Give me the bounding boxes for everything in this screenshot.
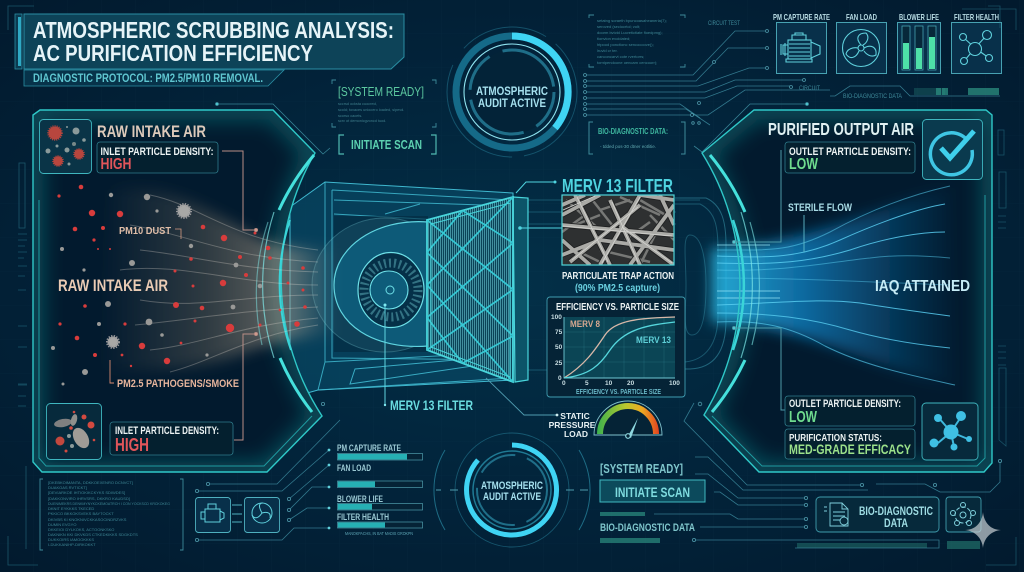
code block top: htpood ponctionc sencocoove();	[597, 42, 654, 47]
readout: purification status	[785, 429, 915, 459]
code block bottom left: [DAKKONVIRO IHRVSRS, DKKRO KAUDSD]	[48, 496, 130, 501]
button: initiate scan top: INITIATE SCAN	[351, 138, 422, 152]
label: PM2.5: PM2.5 PATHOGENS/SMOKE	[117, 378, 239, 390]
readout: inlet density top: HIGH	[100, 156, 132, 173]
heading: purified output air: PURIFIED OUTPUT AIR	[768, 119, 914, 139]
top right icon: fan load: FAN LOAD	[846, 12, 877, 22]
readout: inlet density top: INLET PARTICLE DENSITY:	[100, 146, 214, 158]
dial: atmospheric audit active top	[447, 27, 577, 157]
code block bottom left: PKKICO BKKOKSVEKS BAYTOCKT	[48, 511, 114, 516]
caption: particulate trap	[562, 270, 674, 294]
readout: inlet density bottom: INLET PARTICLE DENSITY:	[115, 425, 219, 437]
chart: efficiency vs particle size: MERV 8	[570, 319, 600, 329]
particle haze flow	[100, 188, 335, 370]
label: lower MERV 13 filter: MERV 13 FILTER	[390, 397, 473, 413]
code block top: lruvid cr ter.	[597, 48, 618, 53]
label: IAQ attained: IAQ ATTAINED	[875, 278, 970, 295]
icon: large particles	[46, 404, 102, 460]
curve: MERV 13	[564, 322, 675, 378]
status: system ready top: scorso cacets.	[338, 114, 362, 118]
label: PM10 dust: PM10 DUST	[119, 226, 171, 237]
code block bottom left: DUMIN EVGYO	[48, 522, 76, 527]
axis labels: 25	[555, 360, 563, 367]
gray dust particles	[51, 193, 262, 386]
bar: fan load: FAN LOAD	[337, 463, 371, 473]
status bars: MANOKPACHS, IN BAT MADIS GROKPN	[345, 531, 413, 536]
dial text: ATMOSPHERIC	[476, 86, 548, 98]
dial text: AUDIT ACTIVE	[478, 98, 546, 110]
right side decorative gauges	[962, 6, 1016, 565]
status: system ready bottom: [SYSTEM READY]	[600, 461, 683, 476]
label: bio-diagnostic data bottom: BIO-DIAGNOSTIC DATA	[600, 522, 695, 534]
status: system ready top: scrv ot demonicgvoncd tuod.	[338, 119, 386, 123]
heading: raw intake air: RAW INTAKE AIR	[97, 122, 206, 141]
icons: bottom motor and fan	[196, 498, 280, 532]
top right icon: blower life: BLOWER LIFE	[899, 12, 939, 22]
labels: circuit	[708, 20, 903, 100]
blue air flow	[712, 186, 958, 388]
chart: efficiency vs particle size	[547, 297, 685, 397]
icon: MERV 13 filter frame	[426, 196, 529, 384]
code block bottom left: DAKNIKN KKI DKVKDS CTKEDKIKKS SDGKDTS	[48, 532, 138, 537]
readout: outlet density bottom: LOW	[789, 409, 818, 426]
icon: gear network	[946, 497, 981, 532]
code block top: setatng soraeth bpuncoasaheaneria(7);	[597, 18, 667, 23]
button: initiate scan bottom	[600, 480, 705, 502]
central unit: blower housing	[290, 182, 726, 395]
panel: raw intake air	[33, 110, 335, 472]
dial: atmospheric audit active bottom	[434, 433, 590, 547]
axis labels: 100	[551, 314, 562, 321]
dial text	[476, 86, 548, 110]
code block bottom left: [DEVIARKOE IHTIOKIKCKYKS SDIWDES]	[48, 490, 125, 495]
code block bottom left: DKIVBS KI KNOKNIVCKKASOCINDRZVKS	[48, 517, 127, 522]
axis labels: 0	[562, 380, 566, 387]
label: lower MERV 13 filter	[384, 304, 473, 413]
status: system ready top: [SYSTEM READY]	[338, 85, 424, 99]
axis labels: 20	[627, 380, 635, 387]
readout: purification status: PURIFICATION STATUS:	[789, 432, 882, 444]
connector: lower density to flow	[234, 332, 258, 440]
bar: blower life: BLOWER LIFE	[337, 494, 383, 504]
status: system ready top: sccrsd ocksta cuocrecl,	[338, 102, 377, 106]
bar: PM capture rate: PM CAPTURE RATE	[337, 443, 401, 453]
code block bottom left: DUAKOAS RVTICKT]	[48, 485, 87, 490]
axis labels: 50	[555, 344, 563, 351]
label: sterile flow: STERILE FLOW	[788, 202, 852, 214]
labels: circuit: CIRCUIT	[799, 85, 820, 92]
code block top	[589, 15, 685, 67]
top right icon: fan load	[836, 12, 886, 74]
caption: particulate trap: (90% PM2.5 capture)	[575, 282, 660, 294]
readout: inlet density bottom	[110, 422, 233, 455]
curve: MERV 8	[564, 317, 675, 378]
status: system ready top: scold; tovaces uniocero loaded, sipevd.	[338, 108, 404, 112]
gauge: static pressure load	[486, 378, 662, 439]
micrograph: filter fibres	[562, 195, 674, 265]
readout: outlet density bottom: OUTLET PARTICLE DENSITY:	[789, 398, 901, 410]
code block top: doorm bvictd Lucretictiate fioedpmg);	[597, 30, 663, 35]
axis labels: 0	[558, 375, 562, 382]
code block top: tionvion evoidated;	[597, 36, 630, 41]
connector: density to flow	[222, 151, 258, 232]
gauge: static pressure load: PRESSURE	[549, 420, 596, 430]
label: raw intake air centre: RAW INTAKE AIR	[58, 276, 168, 295]
subtitle banner	[24, 70, 284, 86]
code block top: seroved (seciocrtol; volt;	[597, 24, 640, 29]
code block bottom left: DKKEIOI DYLKOKS, ACTOONKSKO	[48, 527, 114, 532]
circuit traces: top right	[584, 30, 1000, 125]
particle flow streak lines	[120, 195, 318, 372]
caption: particulate trap: PARTICULATE TRAP ACTION	[562, 270, 674, 282]
labels: circuit: CIRCUIT TEST	[708, 20, 740, 27]
top right icon: filter health: FILTER HEALTH	[954, 12, 999, 22]
panel: purified output air	[702, 110, 992, 472]
title banner	[15, 14, 404, 69]
chart: efficiency vs particle size: MERV 13	[636, 335, 671, 346]
readout: inlet density top	[97, 142, 218, 173]
axis labels: 75	[555, 329, 563, 336]
heading: MERV 13 filter: MERV 13 FILTER	[562, 175, 673, 196]
icon: raw particles	[40, 120, 92, 174]
outlet stream lines	[717, 186, 955, 385]
subtitle banner: DIAGNOSTIC PROTOCOL: PM2.5/PM10 REMOVAL.	[33, 73, 263, 85]
callout: bio-diagnostic data top: - tdded pos-30 dtner eotlitie.	[600, 144, 656, 149]
chart: efficiency vs particle size: EFFICIENCY VS. PARTICLE SIZE	[576, 389, 661, 396]
box: bio-diagnostic data: BIO-DIAGNOSTIC	[859, 506, 933, 518]
box: bio-diagnostic data: DATA	[884, 518, 908, 530]
label: PM2.5	[110, 360, 239, 390]
button: initiate scan top	[339, 135, 436, 154]
label: sterile flow	[788, 202, 852, 252]
callout: bio-diagnostic data top: BIO-DIAGNOSTIC DATA:	[598, 127, 668, 136]
axis labels: 5	[585, 380, 589, 387]
dial: atmospheric audit active bottom: ATMOSPHERIC	[481, 480, 543, 492]
heading: MERV 13 filter	[516, 175, 673, 230]
readout: inlet density bottom: HIGH	[115, 435, 149, 455]
panel outline	[702, 110, 992, 472]
readout: outlet density bottom	[785, 396, 915, 426]
code block bottom left	[40, 479, 183, 550]
code block bottom left: [DKEBKOIMANTA, DDKKOEXENRO DCNVCT]	[48, 480, 133, 485]
circuit: panel tip traces	[216, 102, 808, 154]
title text: AC PURIFICATION EFFICIENCY	[33, 40, 313, 66]
axis labels: 100	[669, 380, 680, 387]
title text	[33, 17, 394, 66]
labels: circuit: BIO-DIAGNOSTIC DATA	[843, 93, 903, 100]
icon: blower fan	[312, 218, 458, 352]
box: bio-diagnostic data	[816, 497, 939, 532]
gauge: static pressure load: STATIC	[560, 411, 590, 421]
bar: filter health: FILTER HEALTH	[337, 512, 389, 522]
top right icon: PM capture rate: PM CAPTURE RATE	[773, 12, 830, 22]
code block bottom left: DUKKOIRS IAMOOKKKS	[48, 537, 94, 542]
callout: bio-diagnostic data top	[589, 122, 685, 154]
code block bottom left: DKNIT EYKKKS TKECED	[48, 506, 94, 511]
readout: outlet density top: OUTLET PARTICLE DENSITY:	[789, 146, 911, 158]
dial: atmospheric audit active bottom: AUDIT ACTIVE	[483, 491, 541, 503]
data strip top right	[914, 88, 999, 95]
readout: outlet density top	[785, 142, 915, 173]
icon: molecule	[922, 403, 978, 460]
code block bottom left: I-DUKKANIHP-DIRKOKKT	[48, 542, 96, 547]
axis labels	[551, 314, 680, 387]
readout: outlet density top: LOW	[789, 156, 819, 173]
connector: lower outlet to flow	[732, 326, 785, 410]
circuit traces: bottom right	[654, 402, 1002, 548]
code block top: tomtpendoone oencarn cencoorr);	[597, 60, 657, 65]
axis labels: 10	[605, 380, 613, 387]
left side decorative gauges	[8, 6, 38, 565]
code block bottom left: DUENIMEKRS DENKMYNYKCKEMOATRCH I CON YOCKSCD KRCKOKEG	[48, 501, 170, 506]
code block top: canconcarvt cote rvertorrs;	[597, 54, 644, 59]
red pathogen particles	[57, 185, 307, 367]
rear motor housing	[528, 200, 700, 370]
circuit traces: bottom centre	[195, 402, 340, 542]
readout: purification status: MED-GRADE EFFICACY	[789, 442, 911, 457]
top right icon: filter health	[952, 12, 1002, 74]
status: system ready top	[332, 80, 436, 127]
panel outline	[33, 110, 322, 472]
top right icon: blower life	[898, 12, 940, 74]
status bars	[337, 443, 422, 536]
gauge: static pressure load: LOAD	[564, 429, 588, 439]
icon: check mark	[922, 120, 982, 180]
chart: efficiency vs particle size: EFFICIENCY VS. PARTICLE SIZE	[556, 301, 679, 313]
top right icon: PM capture rate	[773, 12, 830, 74]
title text: ATMOSPHERIC SCRUBBING ANALYSIS:	[33, 17, 394, 43]
button: initiate scan bottom: INITIATE SCAN	[615, 485, 690, 500]
connector: outlet density to flow	[732, 150, 781, 244]
watermark star	[965, 512, 1001, 548]
data strips bottom	[600, 512, 980, 549]
